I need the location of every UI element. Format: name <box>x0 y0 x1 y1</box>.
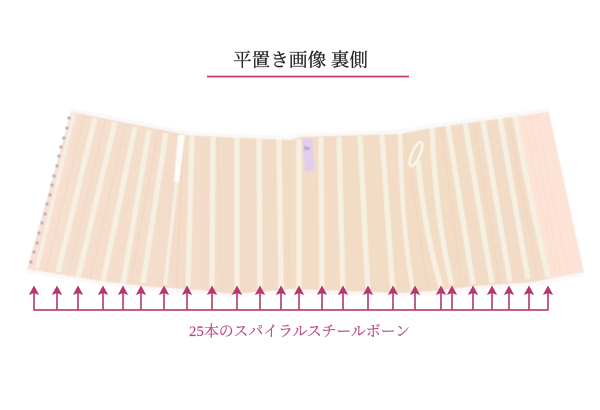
spiral steel bones <box>37 113 548 293</box>
seams <box>46 114 538 292</box>
title underline <box>207 76 409 77</box>
arrow bracket <box>29 286 553 311</box>
baseline <box>33 309 549 311</box>
arrows <box>29 286 553 309</box>
woven label: Dr <box>304 146 310 152</box>
white binding <box>27 110 584 296</box>
caption: 25本のスパイラルスチールボーン <box>189 323 410 340</box>
right hook panel <box>515 109 584 279</box>
woven label <box>302 138 315 172</box>
title: 平置き画像 裏側 <box>233 50 368 72</box>
hook eyes <box>29 116 71 264</box>
corset back view <box>27 109 584 296</box>
hanging loop <box>407 140 425 168</box>
corset body panel <box>27 109 584 295</box>
right panel stitching <box>524 114 569 276</box>
white tab <box>174 135 185 182</box>
left lacing strip <box>27 109 80 270</box>
